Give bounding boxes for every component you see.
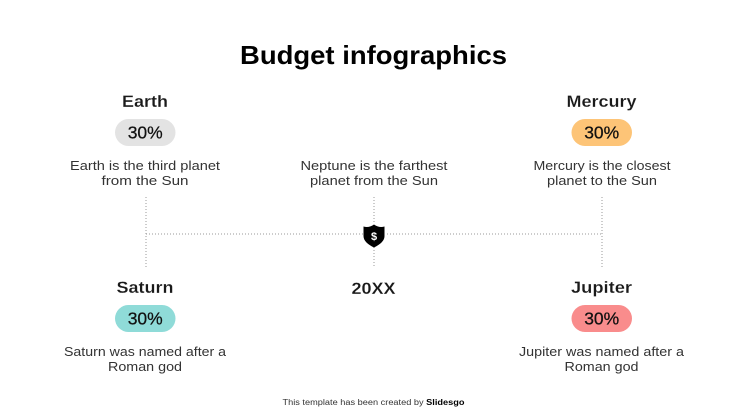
percentage pill: Saturn xyxy=(115,305,176,332)
title: Budget infographics xyxy=(240,40,507,70)
description: Neptune xyxy=(300,158,448,188)
year label: 20XX xyxy=(352,279,396,298)
panel: Mercury xyxy=(534,92,671,188)
panel: Earth xyxy=(70,92,220,188)
panel: Saturn xyxy=(64,278,227,374)
description: Neptune: Neptune is the farthest xyxy=(300,158,448,173)
description: Mercury: planet to the Sun xyxy=(547,173,657,188)
description: Mercury xyxy=(534,158,671,188)
heading: Earth: Earth xyxy=(122,92,168,111)
percentage pill: Mercury: 30% xyxy=(584,122,619,142)
footer credit: This template has been created by Slidesgo xyxy=(282,398,465,407)
panel: Neptune xyxy=(300,158,448,188)
description: Jupiter xyxy=(519,344,685,374)
description: Saturn xyxy=(64,344,227,374)
description: Mercury: Mercury is the closest xyxy=(534,158,671,173)
heading: Saturn: Saturn xyxy=(116,278,174,297)
description: Neptune: planet from the Sun xyxy=(310,173,438,188)
panel: Jupiter xyxy=(519,278,685,374)
description: Saturn: Saturn was named after a xyxy=(64,344,227,359)
description: Saturn: Roman god xyxy=(108,359,182,374)
percentage pill: Earth: 30% xyxy=(128,122,163,142)
description: Earth: Earth is the third planet xyxy=(70,158,220,173)
percentage pill: Jupiter xyxy=(572,305,632,332)
timeline connector lines xyxy=(146,197,602,268)
percentage pill: Saturn: 30% xyxy=(128,308,163,328)
description: Jupiter: Jupiter was named after a xyxy=(519,344,685,359)
icon: shield with dollar sign: $ xyxy=(371,231,377,243)
percentage pill: Earth xyxy=(115,119,176,146)
icon: shield with dollar sign xyxy=(364,224,384,248)
heading: Jupiter: Jupiter xyxy=(571,278,632,297)
description: Earth xyxy=(70,158,220,188)
percentage pill: Jupiter: 30% xyxy=(584,308,619,328)
description: Earth: from the Sun xyxy=(102,173,188,188)
heading: Mercury: Mercury xyxy=(566,92,637,111)
description: Jupiter: Roman god xyxy=(564,359,638,374)
